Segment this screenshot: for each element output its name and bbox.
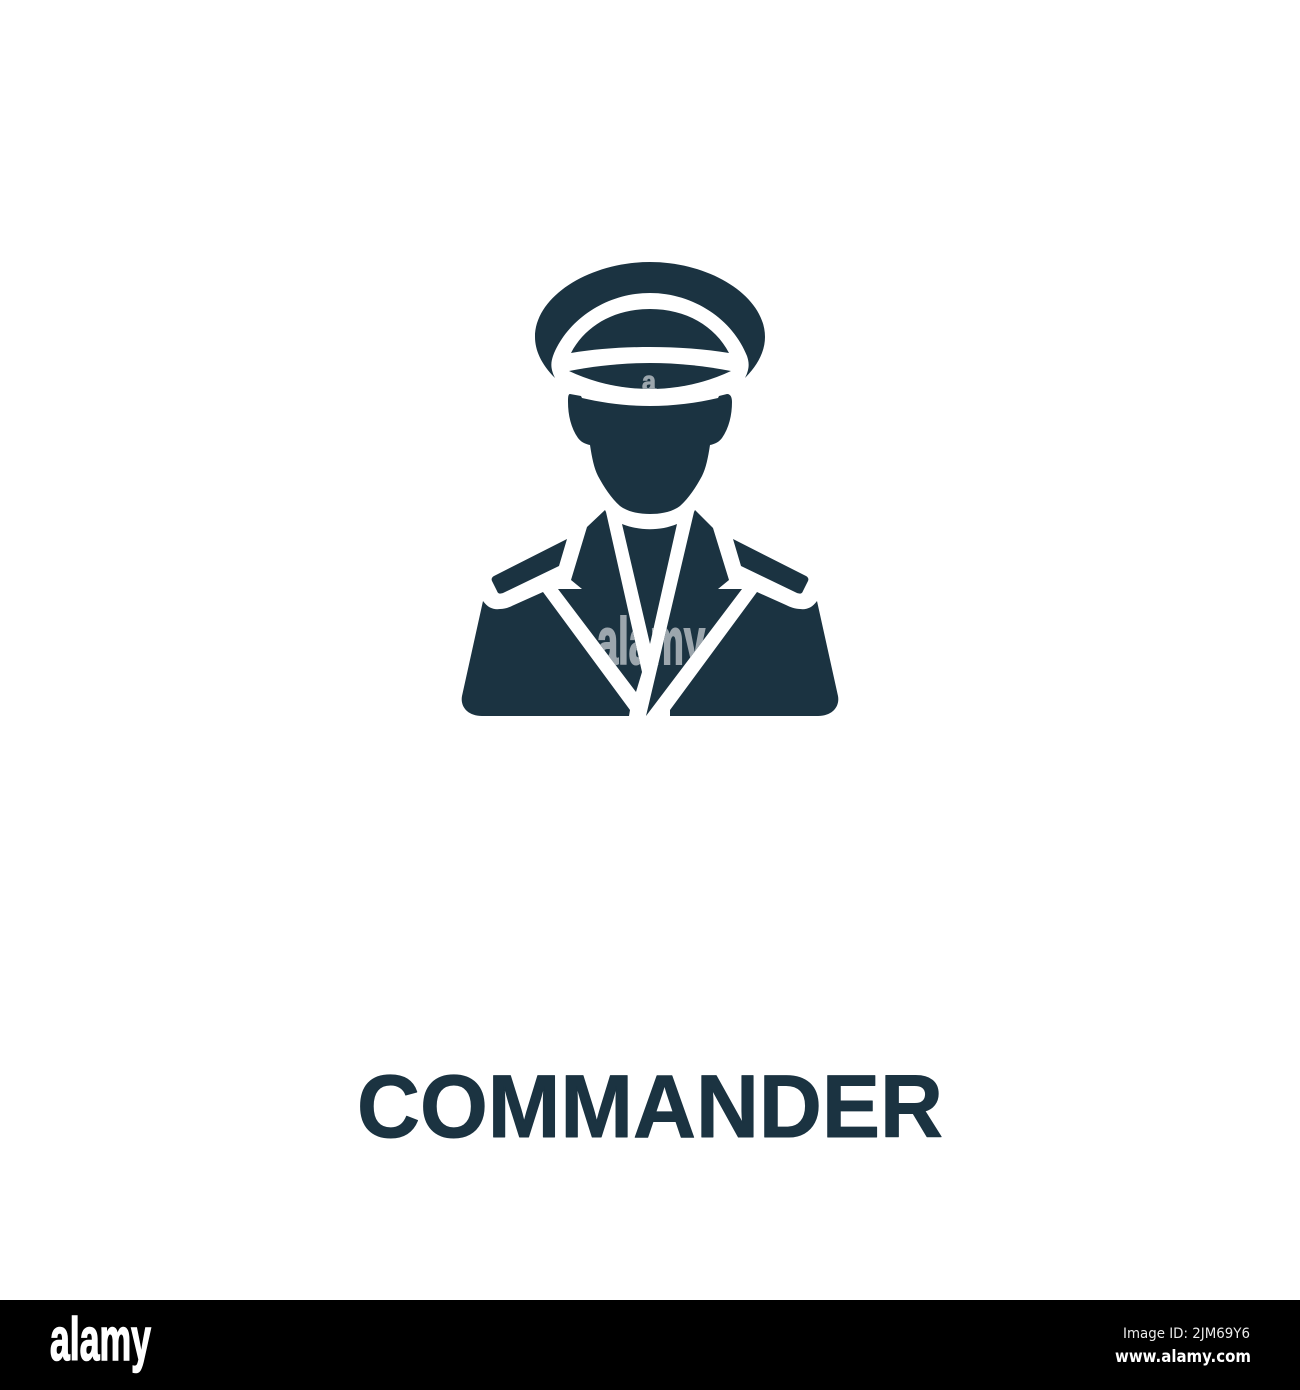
icon: shirt front: [622, 524, 677, 644]
icon: cap crown: [571, 309, 729, 353]
footer band: [0, 1300, 1300, 1390]
watermark on icon: [597, 366, 705, 678]
icon: left epaulette: [492, 539, 567, 594]
icon: left jacket body: [462, 592, 630, 716]
icon: right jacket body: [670, 592, 838, 716]
footer logo: alamy: [50, 1306, 151, 1373]
image id: Image ID: 2JM69Y6: [1123, 1326, 1250, 1342]
icon: right epaulette: [733, 539, 808, 594]
website: www.alamy.com: [1115, 1347, 1251, 1366]
watermark on icon: alamy: [597, 604, 705, 678]
title: COMMANDER: [357, 1056, 943, 1156]
icon: right lapel: [646, 510, 742, 716]
icon: commander in peaked cap and uniform: [462, 262, 838, 716]
watermark on icon: a: [642, 366, 657, 398]
icon: cap visor: [569, 363, 731, 389]
icon: cap outer brim: [535, 262, 765, 378]
icon: head silhouette: [568, 394, 732, 514]
icon: left lapel: [558, 510, 642, 692]
